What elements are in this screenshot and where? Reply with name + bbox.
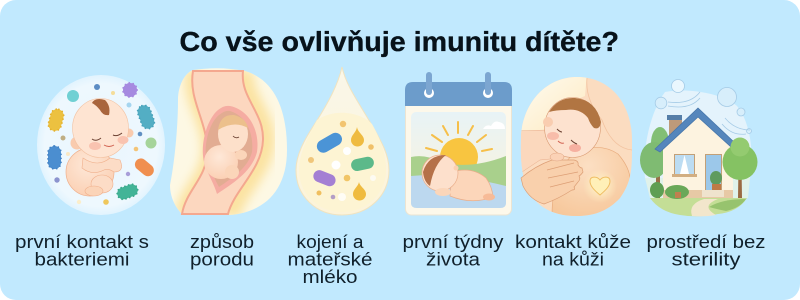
icon: sky backdrop [644, 91, 751, 178]
label: kontakt kůže na kůži [515, 232, 631, 270]
icon: bubble [37, 75, 165, 215]
icon: cream backdrop [165, 65, 290, 217]
label: prostředí bez sterility: prostředí bez [646, 232, 766, 252]
label: způsob porodu: způsob [190, 232, 254, 252]
panel: skin to skin [520, 77, 632, 216]
icon: left tree [640, 127, 669, 198]
icon: glowing heart [583, 169, 617, 203]
label: způsob porodu [190, 232, 254, 270]
icon: bushes [650, 182, 689, 199]
icon: bacteria [47, 83, 156, 205]
icon: fetus [203, 106, 258, 194]
label: kontakt kůže na kůži: na kůži [542, 250, 604, 270]
icon: drop [296, 67, 389, 215]
label: kojení a mateřské mléko: mléko [302, 267, 358, 287]
label: prostředí bez sterility [646, 232, 766, 270]
panel: milk drop [296, 67, 389, 215]
icon: chest [552, 147, 632, 222]
label: první kontakt s bakteriemi: první kontakt s [15, 232, 149, 252]
icon: calendar header [405, 82, 512, 106]
label: kojení a mateřské mléko [288, 232, 372, 287]
label: kojení a mateřské mléko: mateřské [288, 250, 372, 270]
icon: baby body [520, 130, 551, 172]
icon: calendar rings [424, 72, 493, 98]
icon: sun scene [411, 112, 506, 208]
label: kojení a mateřské mléko: kojení a [296, 232, 365, 252]
label: první týdny života: života [426, 250, 481, 270]
label: první kontakt s bakteriemi: bakteriemi [34, 250, 130, 270]
icon: uterus [182, 71, 263, 214]
icon: right tree [722, 138, 758, 198]
panel: birth canal [165, 65, 290, 217]
icon: baby head [543, 98, 601, 161]
icon: milk particles [308, 121, 376, 201]
icon: sleeping baby [422, 155, 495, 201]
icon: light [522, 77, 586, 130]
label: první týdny života [402, 232, 504, 270]
label: kontakt kůže na kůži: kontakt kůže [515, 232, 631, 252]
icon: ground [650, 198, 747, 216]
label: prostředí bez sterility: sterility [672, 250, 740, 270]
label: způsob porodu: porodu [190, 250, 254, 270]
panel: baby with bacteria [37, 75, 165, 215]
panel: house [640, 80, 758, 216]
icon: oval backdrop [520, 77, 632, 216]
title: Co vše ovlivňuje imunitu dítěte? [180, 26, 619, 57]
icon: house [655, 108, 735, 198]
icon: bubbles [655, 80, 752, 134]
icon: calendar page [406, 84, 512, 215]
icon: hand [521, 160, 583, 204]
label: první kontakt s bakteriemi [15, 232, 149, 270]
label: první týdny života: první týdny [402, 232, 504, 252]
panel: calendar [405, 72, 512, 215]
icon: baby [66, 98, 134, 196]
